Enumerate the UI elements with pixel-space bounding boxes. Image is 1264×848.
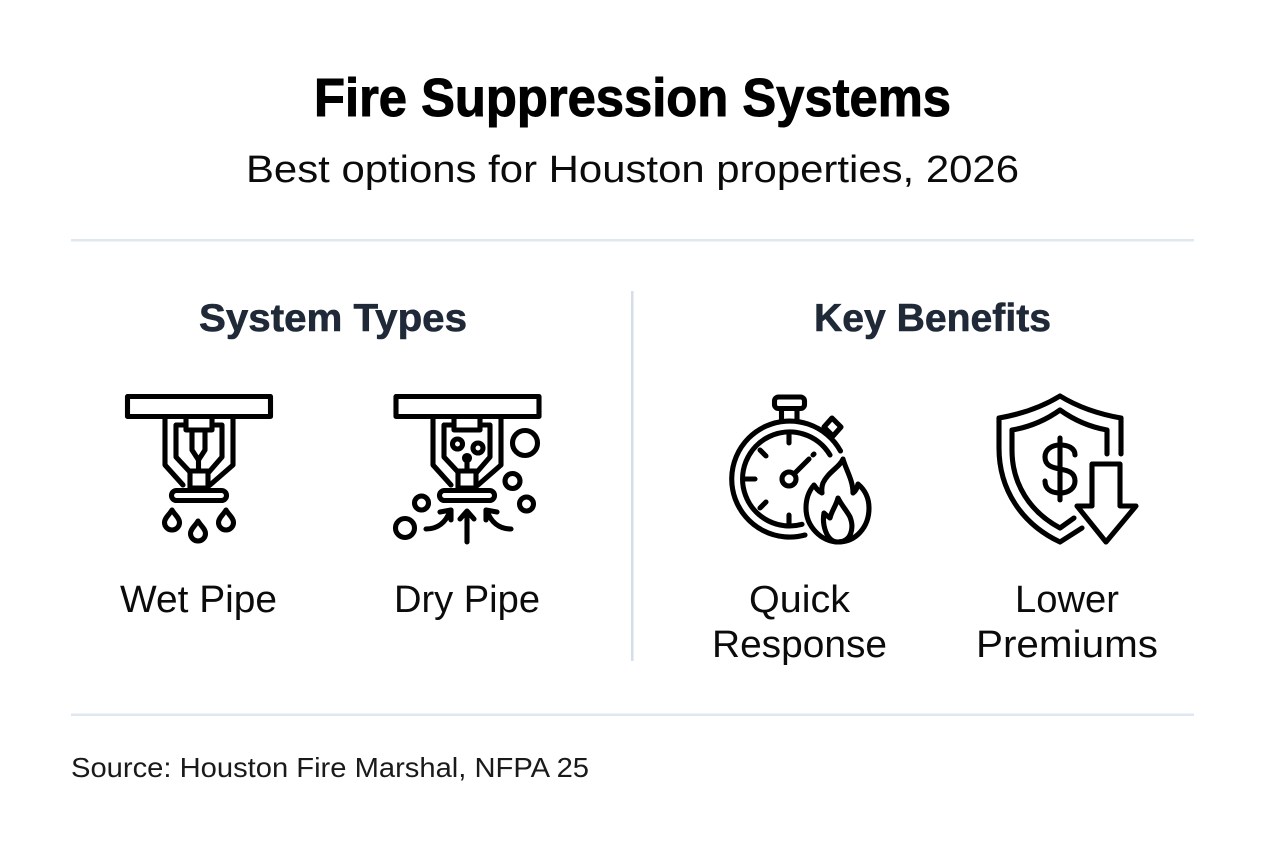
source note: Source: Houston Fire Marshal, NFPA 25	[71, 752, 589, 783]
icon: wet pipe sprinkler with water drops	[128, 396, 270, 541]
heading: system types: System Types	[199, 297, 467, 340]
panel: system types	[120, 297, 540, 621]
icon: dry pipe sprinkler with air bubbles and arrows	[396, 396, 539, 542]
label: dry pipe: Dry Pipe	[394, 579, 540, 621]
icon: stopwatch with flame	[732, 397, 869, 542]
label: lower premiums: Lower	[1015, 579, 1119, 621]
label: lower premiums	[976, 579, 1158, 666]
icon: shield with dollar sign and down arrow	[999, 396, 1136, 542]
label: quick response: Response	[712, 624, 887, 666]
title: Fire Suppression Systems	[314, 68, 951, 128]
subtitle: Best options for Houston properties, 2026	[246, 149, 1019, 191]
label: wet pipe: Wet Pipe	[120, 579, 277, 621]
label: lower premiums: Premiums	[976, 624, 1158, 666]
label: quick response	[712, 579, 887, 666]
heading: key benefits: Key Benefits	[814, 297, 1051, 340]
label: quick response: Quick	[749, 579, 851, 621]
panel: key benefits	[712, 297, 1158, 666]
